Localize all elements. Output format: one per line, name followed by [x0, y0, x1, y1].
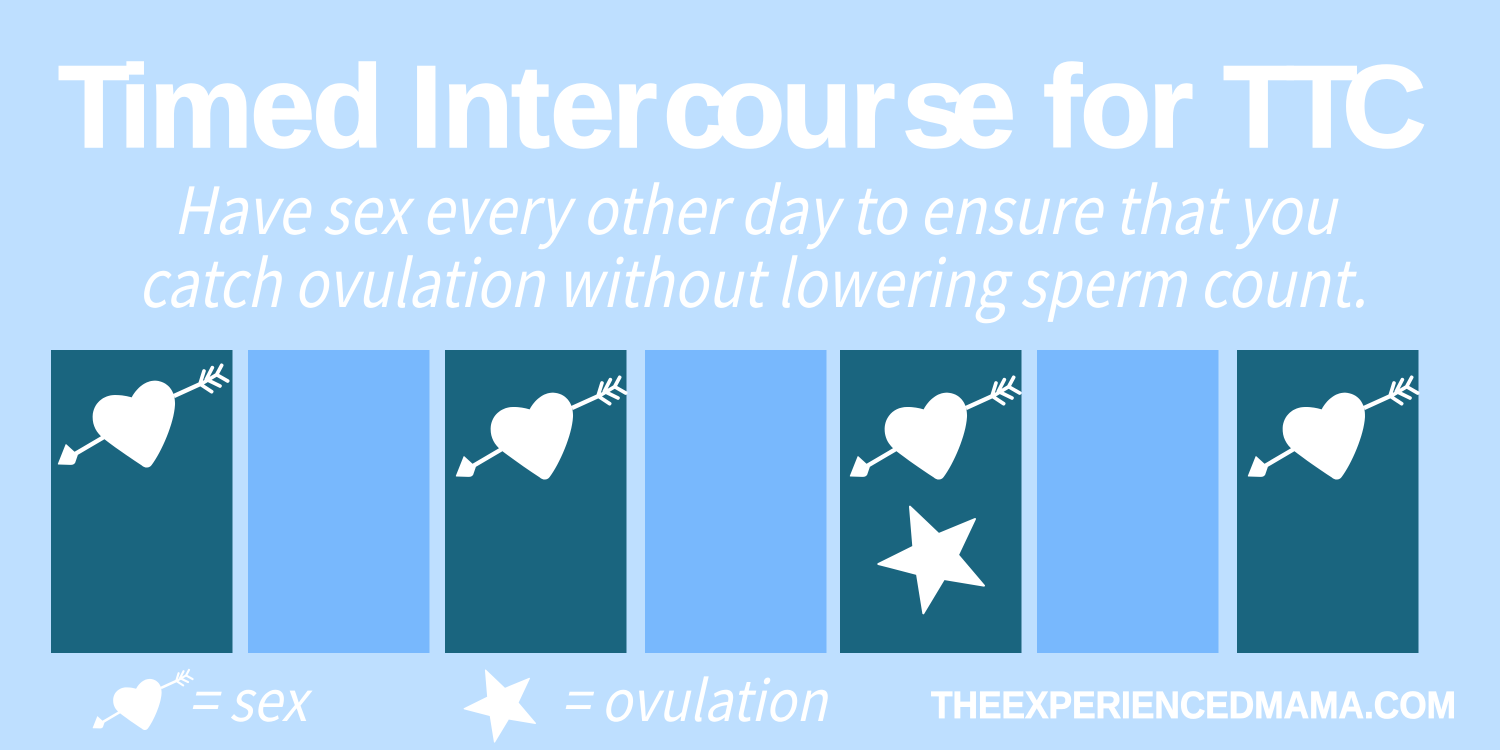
icon: heart with arrow — [93, 670, 193, 730]
calendar strip: seven days — [51, 350, 1418, 653]
icon: heart with arrow — [1248, 377, 1418, 480]
day 7: sex — [1237, 350, 1418, 653]
website credit: THEEXPERIENCEDMAMA.COM — [931, 685, 1456, 727]
subtitle — [138, 159, 1367, 326]
day 5: sex and ovulation — [840, 350, 1022, 653]
icon: heart with arrow — [850, 377, 1020, 480]
day 2: empty — [248, 350, 430, 653]
day 1: sex — [51, 350, 232, 653]
day 6: empty — [1037, 350, 1218, 653]
icon: star — [878, 507, 984, 613]
legend: sex: = sex — [188, 657, 313, 738]
icon: heart with arrow — [58, 365, 228, 468]
legend: sex — [93, 657, 313, 738]
icon: heart with arrow — [456, 377, 626, 480]
legend: ovulation — [464, 657, 830, 742]
day 4: empty — [645, 350, 826, 653]
subtitle: Have sex every other day to ensure that you — [173, 159, 1339, 253]
title: Timed Intercourse for TTC — [58, 41, 1426, 172]
icon: star — [464, 670, 535, 742]
legend: ovulation: = ovulation — [561, 657, 830, 738]
day 3: sex — [445, 350, 626, 653]
